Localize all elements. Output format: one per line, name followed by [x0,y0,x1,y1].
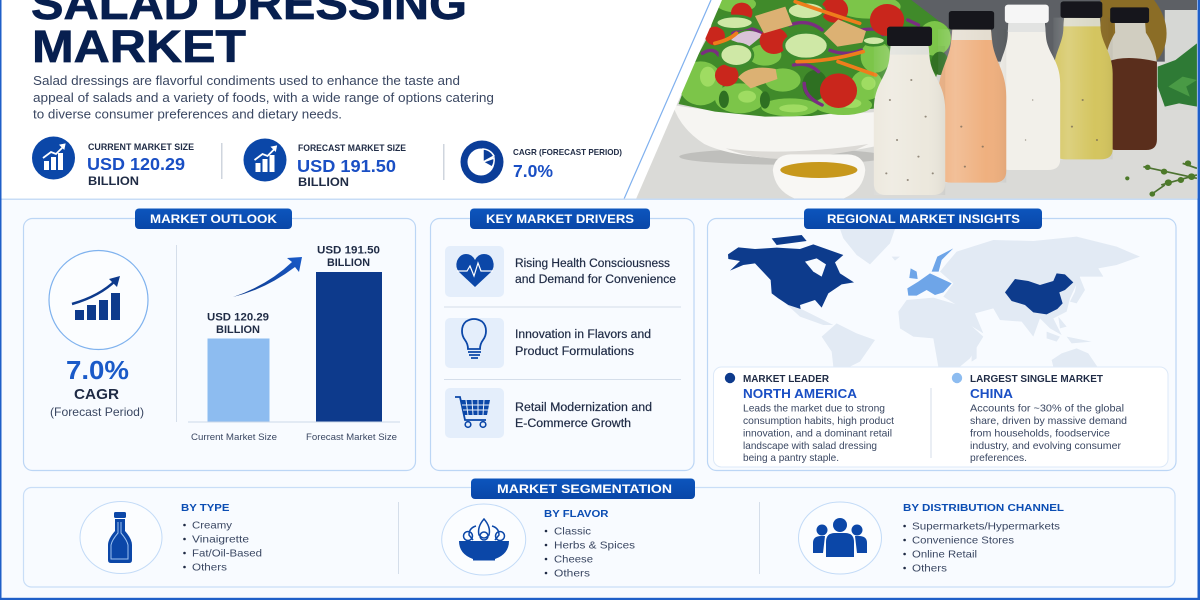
title: MARKET [32,21,246,72]
heading: market segmentation [471,478,695,499]
stat: forecast market size: USD 191.50 [297,156,396,176]
divider [176,245,177,422]
divider [930,388,932,458]
heading: key market drivers: KEY MARKET DRIVERS [486,214,634,226]
cucumbers [716,2,885,66]
driver: health [445,246,676,297]
panel: key market drivers [430,208,694,470]
stat: CAGR value: (Forecast Period) [50,405,144,419]
driver: innovation [445,318,651,368]
driver: retail [445,388,652,438]
segment: by type: BY TYPE [181,502,230,514]
stat: CAGR value: CAGR [74,386,119,403]
panel: market outlook [24,208,416,470]
bottle speckles [885,79,1098,181]
segment: by distribution channel: Supermarkets/Hypermarkets [912,520,1060,532]
segment: by type: Vinaigrette [192,534,249,546]
segment: by distribution channel: Others [912,562,947,574]
bar chart: BILLION [327,257,370,269]
stat: CAGR: CAGR (FORECAST PERIOD) [513,147,622,157]
bar chart: USD 191.50 [317,244,380,256]
driver: health: Rising Health Consciousness [515,258,670,270]
stat: current market size: CURRENT MARKET SIZE [88,142,194,152]
segment: by flavor: Herbs & Spices [554,540,635,552]
driver: health: and Demand for Convenience [515,274,676,286]
segment: by distribution channel [798,502,1065,574]
world map [728,229,1140,367]
panel: market segmentation [24,478,1175,587]
heading: market segmentation: MARKET SEGMENTATION [497,484,672,496]
segment: by flavor: BY FLAVOR [544,508,609,520]
segment: by flavor: Others [554,568,590,580]
market leader: consumption habits, high product [743,415,894,427]
segment: by flavor [442,504,635,580]
stat: CAGR value [50,355,144,419]
stat: current market size [32,136,194,188]
stat: forecast market size [244,138,406,189]
largest single market: industry, and evolving consumer [970,440,1121,452]
bottle 1: creamy [874,46,945,195]
divider [443,144,444,180]
driver: retail: E-Commerce Growth [515,418,631,430]
divider [444,306,681,308]
carrot [715,2,876,75]
segment: by type: Fat/Oil-Based [192,548,262,560]
bottle 5: brown [1108,23,1157,62]
heading: regional market insights [804,208,1042,229]
photo: salad bowl and dressing bottles [629,0,1200,200]
stat: current market size: USD 120.29 [87,154,185,174]
header panel [0,0,1200,200]
header bottom rule [0,198,1200,200]
right herbs [1158,43,1197,107]
description text: appeal of salads and a variety of foods, with a wide range of options catering [33,90,494,105]
driver: innovation: Product Formulations [515,346,634,358]
info card [714,367,1168,467]
stat: CAGR [460,140,622,184]
segment: by distribution channel: Convenience Stores [912,534,1014,546]
segment: by distribution channel: BY DISTRIBUTION CHANNEL [903,502,1065,514]
market leader: landscape with salad dressing [743,440,877,452]
market leader: MARKET LEADER [743,374,830,385]
driver: innovation: Innovation in Flavors and [515,329,651,341]
bottle 3: white [998,23,1060,170]
largest single market: Accounts for ~30% of the global [970,403,1124,415]
divider [398,502,399,574]
small dip bowl [773,154,865,198]
largest single market: preferences. [970,452,1027,464]
bar chart: BILLION [216,324,260,336]
heading: key market drivers [470,208,650,229]
salad greens [679,0,951,117]
arrow: growth [233,257,302,297]
largest single market [952,373,1127,464]
heading: market outlook: MARKET OUTLOOK [150,214,278,226]
tomatoes [705,0,904,108]
largest single market: LARGEST SINGLE MARKET [970,374,1103,385]
stat: CAGR value: 7.0% [66,355,129,385]
bowl shadow [679,150,874,164]
stat: current market size: BILLION [88,176,139,188]
description text [33,73,494,122]
description text: Salad dressings are flavorful condiments used to enhance the taste and [33,73,460,88]
bottle 4: yellow [1053,18,1113,159]
bowl [674,106,874,158]
croutons [738,7,866,88]
driver: retail: Retail Modernization and [515,402,652,414]
bottle 2: orange [938,29,1006,183]
market leader: Leads the market due to strong [743,403,885,415]
bar chart [188,244,400,443]
photo edge line [624,0,711,199]
market leader [725,373,894,464]
divider [444,379,681,380]
panel: regional market insights [708,208,1176,470]
heading: market outlook [135,208,292,229]
segment: by flavor: Cheese [554,554,593,566]
title [31,0,467,72]
description text: to diverse consumer preferences and dietary needs. [33,106,342,122]
bar chart: Current Market Size [191,432,277,443]
segment: by flavor: Classic [554,526,591,538]
bar chart: USD 120.29 [207,312,269,324]
largest single market: from households, foodservice [970,428,1110,440]
cabbage [702,20,918,105]
largest single market: share, driven by massive demand [970,415,1127,427]
market leader: innovation, and a dominant retail [743,428,892,440]
largest single market: CHINA [970,386,1014,401]
heading: regional market insights: REGIONAL MARKET INSIGHTS [827,214,1020,226]
segment: by type [80,502,262,574]
stat: forecast market size: FORECAST MARKET SIZE [298,143,406,153]
segment: by distribution channel: Online Retail [912,548,977,560]
segment: by type: Creamy [192,520,233,532]
bar chart: Forecast Market Size [306,432,397,443]
divider [221,143,222,179]
segment: by type: Others [192,562,227,574]
market leader: being a pantry staple. [743,452,839,464]
stat: forecast market size: BILLION [298,177,349,189]
market leader: NORTH AMERICA [743,386,858,401]
icon: growth chart in circle [49,250,148,350]
divider [759,502,760,574]
stat: CAGR: 7.0% [513,161,553,181]
